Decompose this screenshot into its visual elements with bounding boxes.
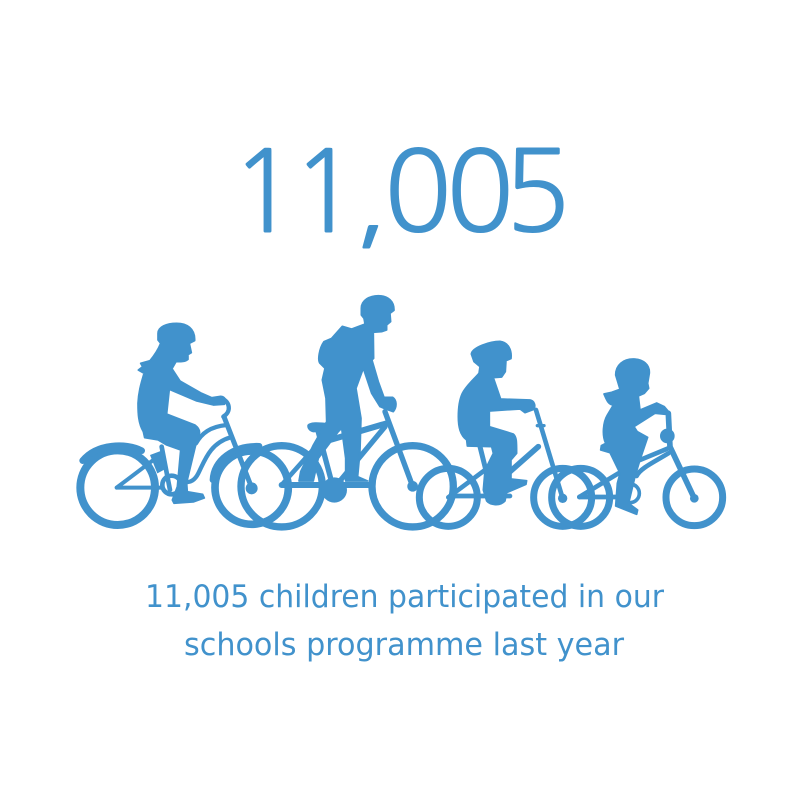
caption line 1: 11,005 children participated in our [145, 579, 664, 615]
bike and rider 1: girl [80, 323, 288, 525]
caption text [145, 579, 664, 663]
bike and rider 4: small girl [552, 359, 723, 526]
caption line 2: schools programme last year [184, 627, 624, 663]
illustration: family cycling [80, 296, 723, 527]
bike and rider 3: boy [419, 341, 592, 526]
bike and rider 2: boy with backpack [241, 296, 453, 527]
title: big number: 11,005 [229, 135, 572, 249]
